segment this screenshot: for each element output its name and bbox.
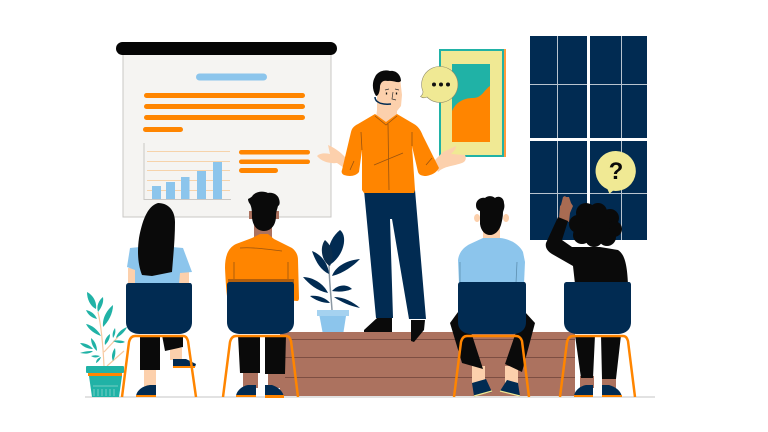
raised arm and body [546,217,628,284]
neck and ears [249,211,279,240]
legs [144,368,156,388]
ankles [472,366,518,383]
plant pot left [86,366,124,397]
speech bubble: question: ? [609,158,623,185]
floor line [85,396,655,398]
shirt [458,238,525,284]
window [530,36,647,240]
chair [454,282,529,397]
legs [575,335,621,379]
chair [122,283,196,397]
presenter eyes [386,92,396,94]
stage [280,332,575,396]
shoes [472,379,520,396]
presenter trousers [364,190,426,319]
neck and ears [474,214,509,238]
presenter shoes [364,318,425,342]
text lines on screen [143,93,305,132]
speech bubble: ellipsis [420,66,458,102]
presenter shirt [342,114,439,193]
presenter hair [373,70,401,96]
raised hand [559,196,573,222]
audience member 3 [450,196,535,397]
presenter [317,70,466,342]
ankles [580,376,616,388]
framed picture [439,49,506,157]
plant: left [80,292,127,397]
shirt [127,247,192,284]
long hair [138,203,175,276]
legs [243,370,282,388]
presenter neck and face [376,78,402,122]
plant pot [317,310,349,332]
chart caption lines [239,150,310,173]
presenter right hand [433,146,466,172]
audience member 4 [546,196,635,397]
shoes [136,385,156,397]
presenter left hand [317,145,351,170]
chair [560,282,635,397]
panel: projection screen [116,42,337,217]
audience member 1 [122,203,196,397]
legs [450,312,535,372]
speech bubble: question [596,151,636,194]
hair [248,192,280,231]
shoes [236,385,284,397]
chair [223,279,298,397]
shirt [225,234,299,301]
headset [375,97,391,104]
shoes [574,385,622,397]
bar chart [144,143,231,200]
audience member 2 [223,192,299,398]
afro hair [569,203,622,247]
heading bar on screen [196,74,267,80]
arms [128,268,189,284]
plant: centre [303,230,360,332]
presenter face details [385,89,399,100]
hair [476,196,504,235]
